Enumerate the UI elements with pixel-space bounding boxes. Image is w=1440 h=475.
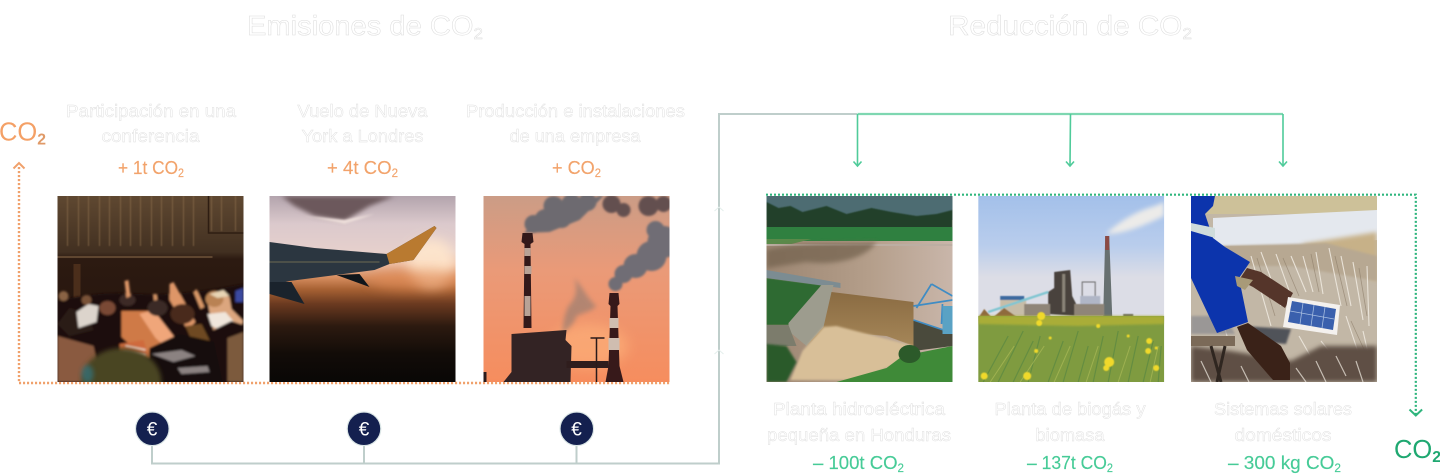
heading: Emisiones de CO2: 2 — [474, 26, 483, 43]
emission values: + CO — [552, 157, 596, 178]
orange dotted emissions arrow — [14, 163, 670, 383]
reduction values: – 137t CO — [1027, 452, 1111, 473]
reduction labels: Planta hidroeléctrica — [773, 399, 945, 419]
reduction labels — [767, 399, 1352, 445]
euro coin markers: € — [147, 420, 158, 440]
photo: smokestacks at sunset — [484, 196, 670, 382]
green dotted reduction arrow — [766, 195, 1422, 416]
reduction labels: pequeña en Honduras — [767, 425, 951, 445]
reduction labels: Planta de biogás y — [994, 399, 1146, 419]
emission values — [118, 157, 601, 180]
euro coin markers: € — [571, 420, 582, 440]
reduction labels: Sistemas solares — [1214, 399, 1352, 419]
emission labels: York a Londres — [302, 126, 424, 146]
emission labels — [66, 101, 685, 146]
reduction values — [813, 452, 1341, 475]
reduction values: 2 — [1334, 463, 1341, 475]
reduction values: – 100t CO — [813, 452, 897, 473]
emission labels: de una empresa — [510, 126, 641, 146]
photo: hand holding a solar panel — [1191, 196, 1377, 382]
reduction labels: domésticos — [1234, 425, 1332, 445]
heading: Emisiones de CO2: Emisiones de CO — [247, 10, 461, 41]
reduction values: 2 — [898, 463, 904, 475]
money flow connector — [152, 114, 857, 464]
emission values: + 1t CO — [118, 157, 182, 178]
heading: Reducción de CO2: Reducción de CO — [948, 10, 1165, 41]
photo: airplane wing at sunset — [270, 196, 456, 382]
emission values: 2 — [178, 168, 184, 180]
reduction values: 2 — [1107, 463, 1113, 475]
emission values: 2 — [392, 168, 398, 180]
photo: biogas and biomass plant — [978, 196, 1164, 382]
reduction labels: biomasa — [1036, 425, 1105, 445]
reduction values: – 300 kg CO — [1228, 452, 1332, 473]
emission labels: Producción e instalaciones — [466, 101, 685, 121]
CO2 label: emissions: CO — [0, 116, 38, 146]
CO2 label: emissions: 2 — [37, 132, 46, 148]
emission labels: Vuelo de Nueva — [298, 101, 428, 121]
emission values: 2 — [595, 168, 601, 180]
euro coin markers: € — [359, 420, 370, 440]
emission labels: Participación en una — [66, 101, 236, 121]
photo: concert crowd — [58, 196, 244, 382]
green distribution arrows — [854, 114, 1287, 166]
photo: small hydroelectric dam — [766, 196, 952, 382]
emission values: + 4t CO — [327, 157, 391, 178]
emission labels: conferencia — [102, 126, 200, 146]
euro coin markers — [136, 412, 594, 446]
heading: Reducción de CO2: 2 — [1182, 26, 1192, 43]
CO2 label: reductions: CO — [1394, 434, 1433, 464]
